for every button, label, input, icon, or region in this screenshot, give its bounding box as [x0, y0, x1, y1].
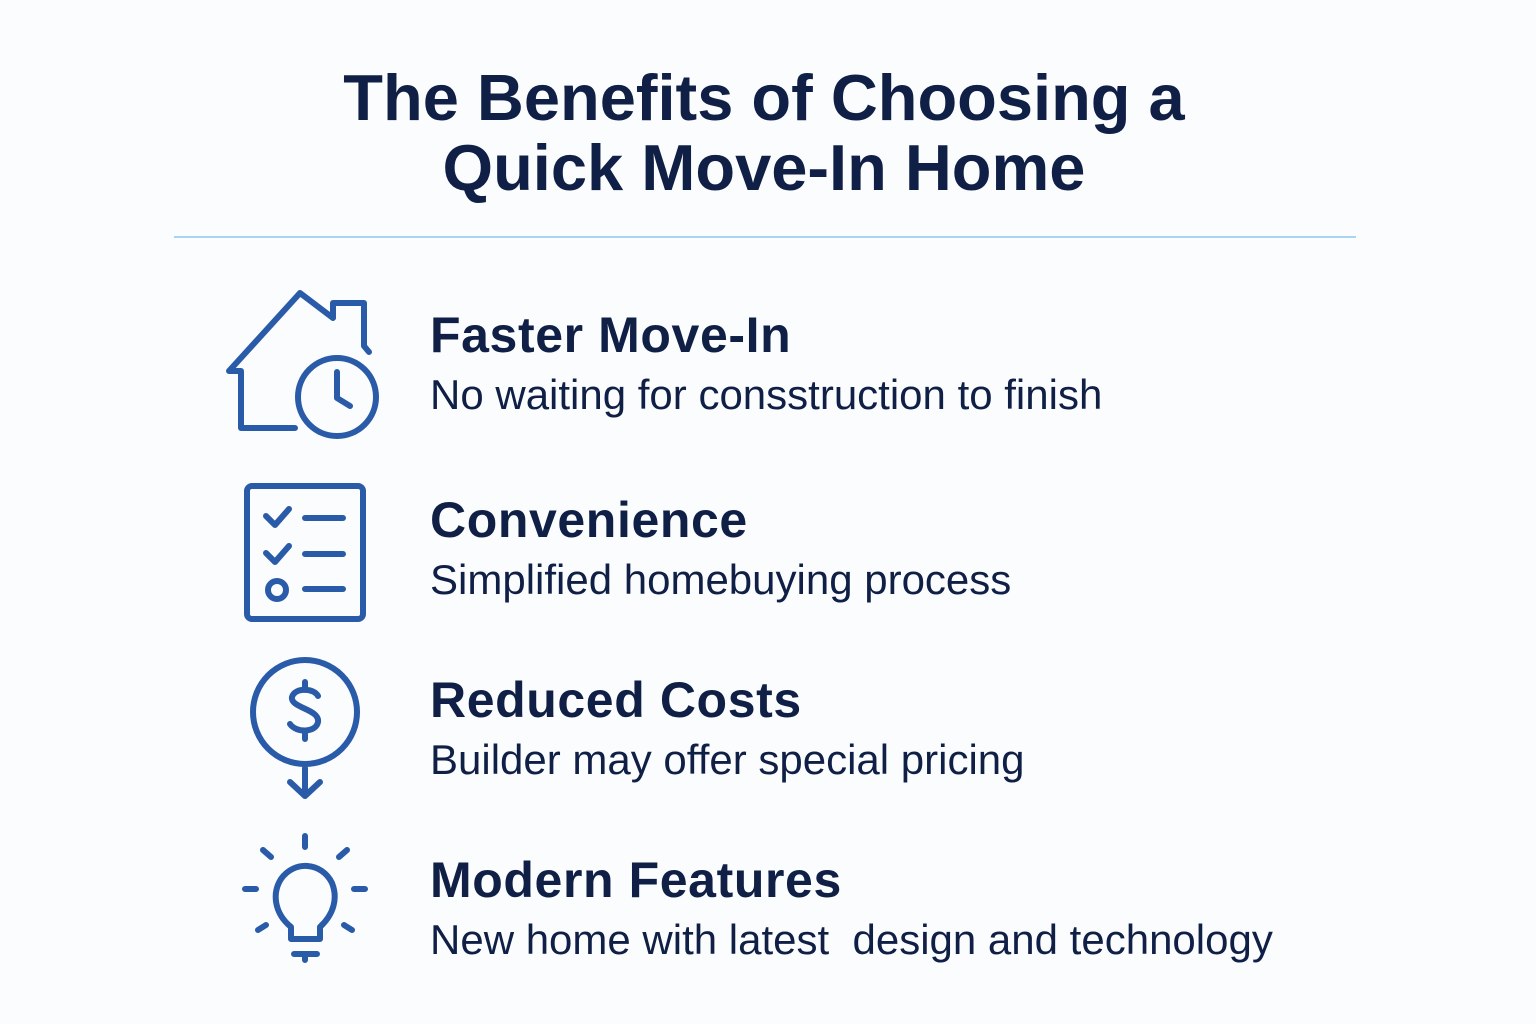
icon: checklist — [244, 483, 366, 622]
icon: house with clock — [226, 290, 379, 439]
item 4: Modern Features — [430, 852, 1273, 963]
item 4: Modern Features: New home with latest design and technology — [430, 916, 1273, 963]
title: The Benefits of Choosing a — [343, 61, 1185, 134]
title: Quick Move-In Home — [443, 131, 1085, 204]
item 1: Faster Move-In: No waiting for consstruction to finish — [430, 371, 1102, 418]
item 4: Modern Features: Modern Features — [430, 852, 842, 908]
item 3: Reduced Costs: Reduced Costs — [430, 672, 802, 728]
item 2: Convenience: Convenience — [430, 492, 748, 548]
item 3: Reduced Costs — [430, 672, 1025, 783]
item 2: Convenience: Simplified homebuying process — [430, 556, 1011, 603]
item 1: Faster Move-In: Faster Move-In — [430, 307, 791, 363]
item 2: Convenience — [430, 492, 1011, 603]
item 1: Faster Move-In — [430, 307, 1102, 418]
item 3: Reduced Costs: Builder may offer special pricing — [430, 736, 1025, 783]
title — [343, 61, 1186, 204]
icon: light bulb — [242, 833, 368, 963]
icon: dollar with down arrow — [250, 657, 360, 799]
